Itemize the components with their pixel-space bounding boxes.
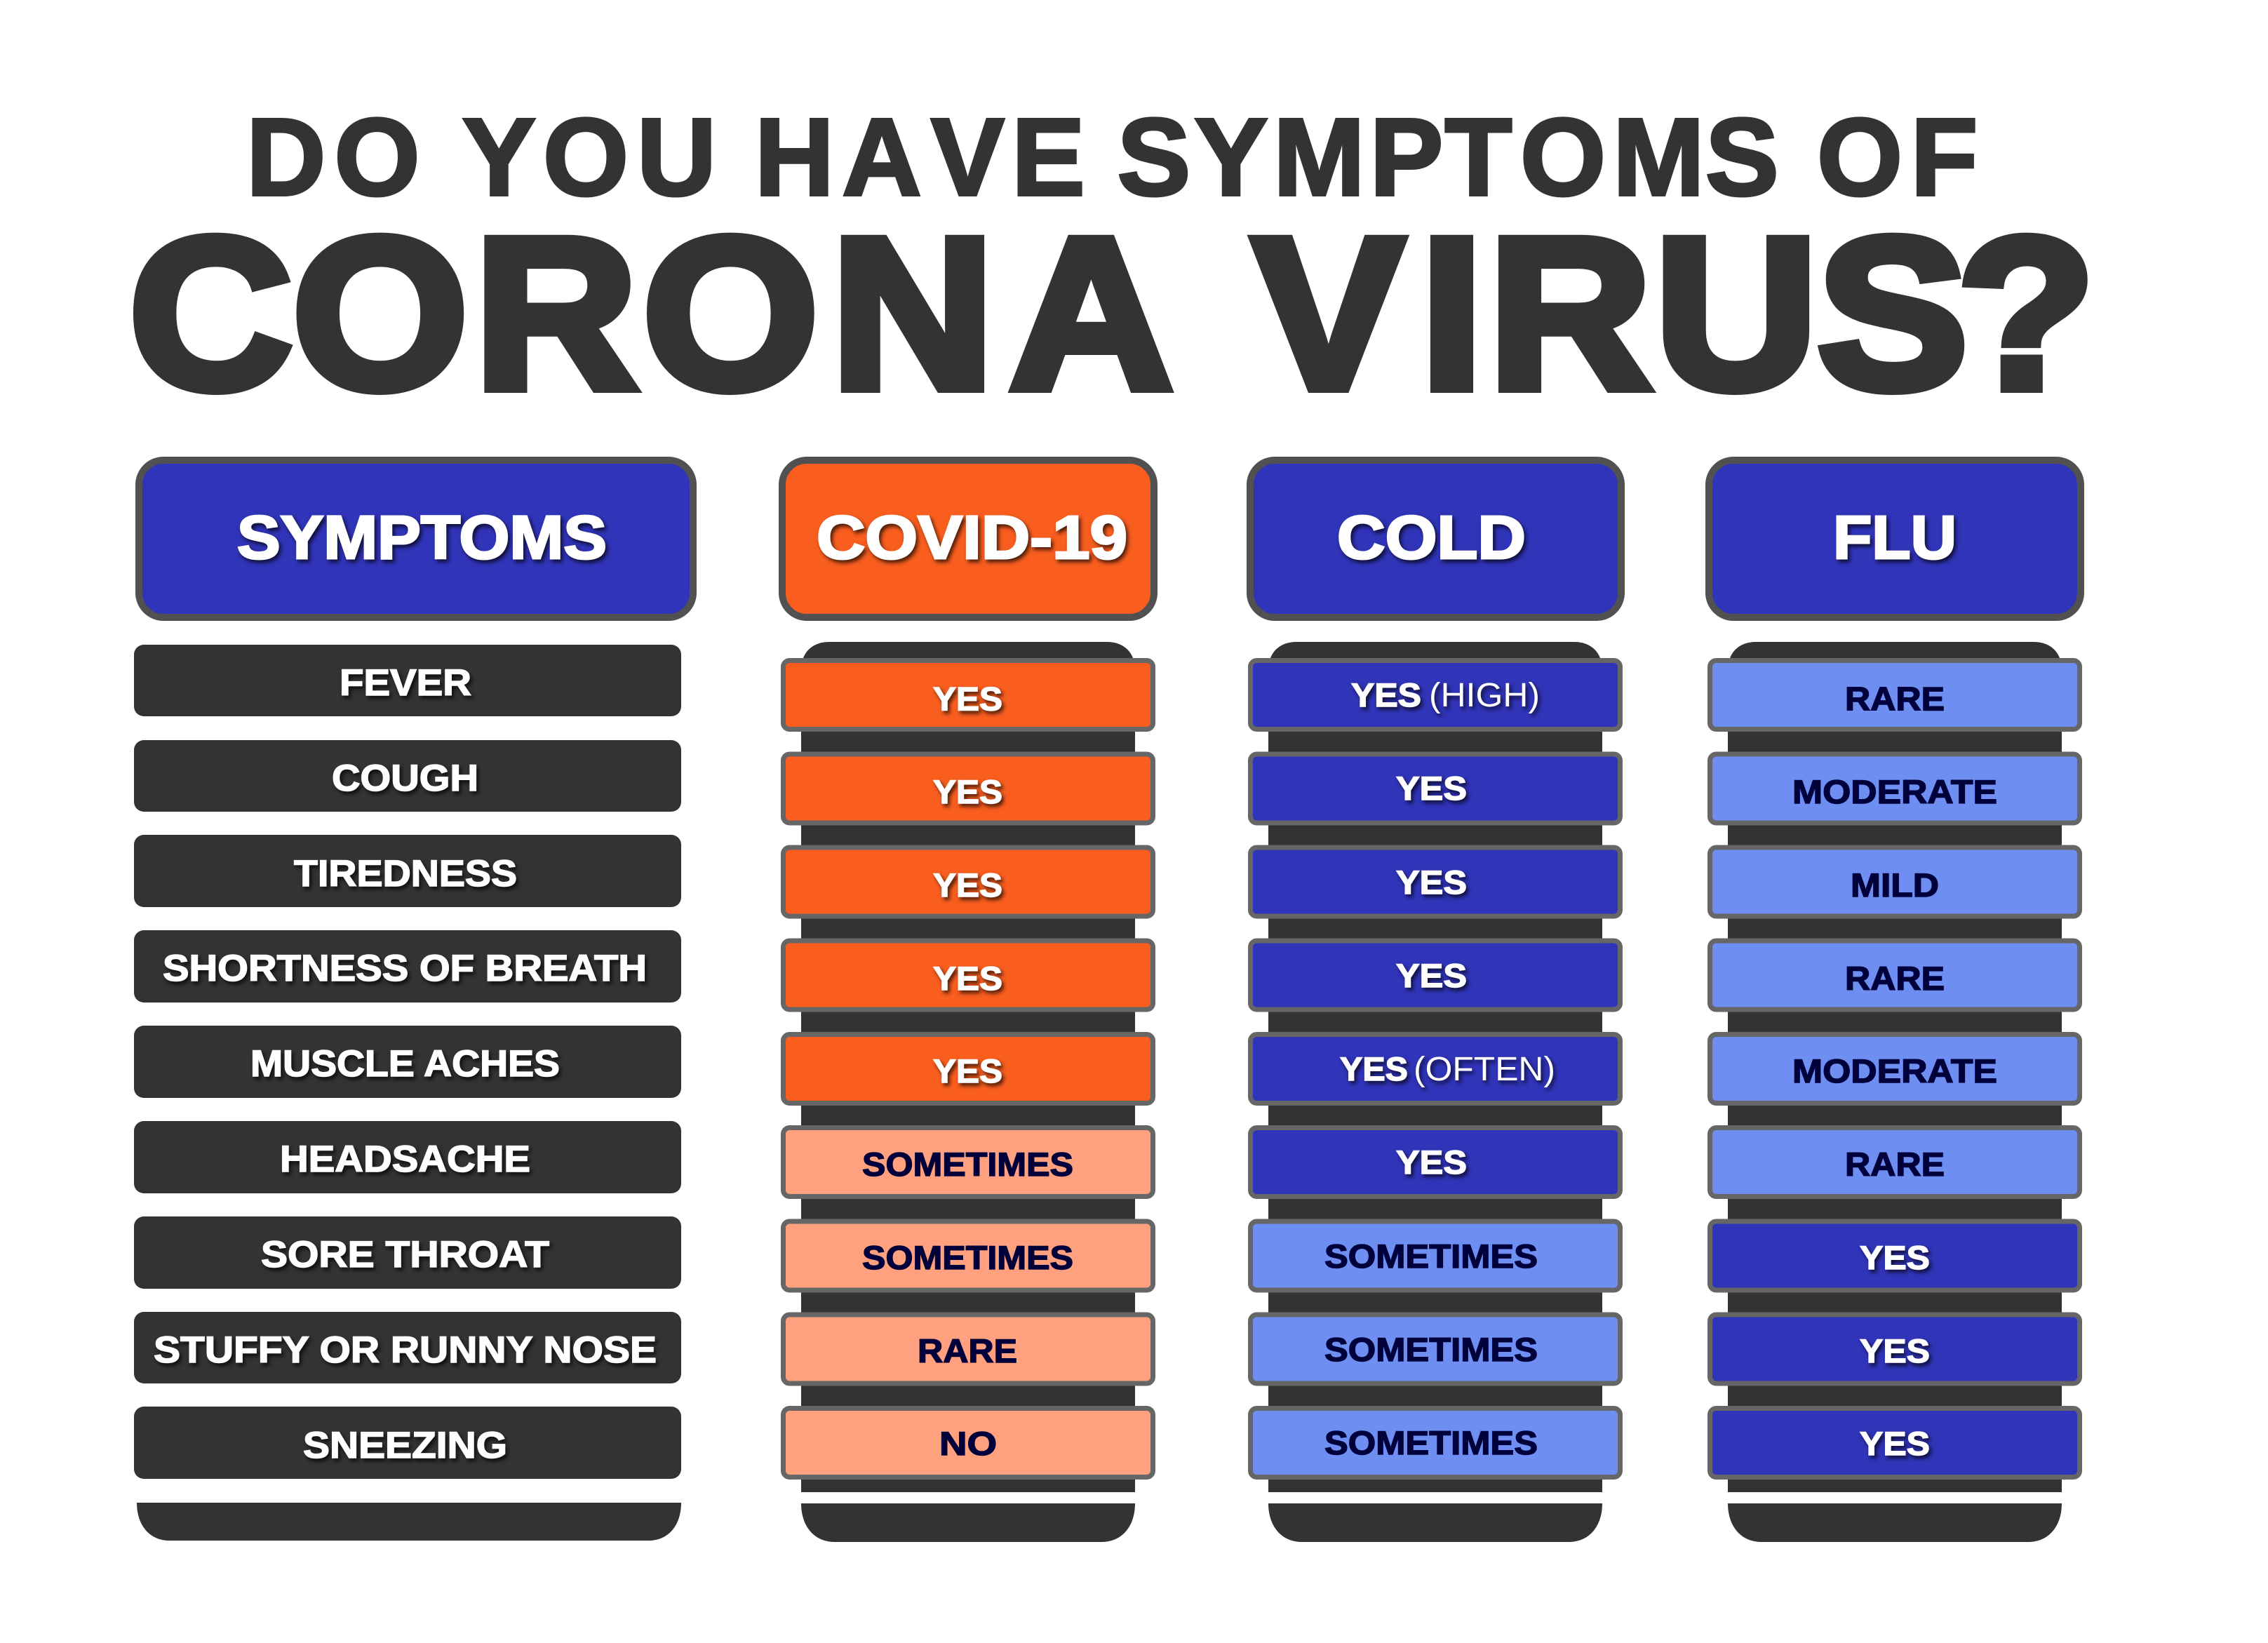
row: sneezing yes [1710,1409,2079,1477]
row: fever yes high: (HIGH) [1429,677,1540,714]
title line 2: VIRUS? [1253,193,2095,434]
row: muscle aches [134,1026,681,1098]
row: headache rare [1710,1128,2079,1197]
row: aches yes often [1250,1034,1621,1103]
row: stuffy or runny nose [134,1312,681,1383]
header: covid-19 [782,460,1154,617]
row: aches moderate: MODERATE [1792,1053,1997,1090]
bottom cap [137,1503,681,1541]
row: shortness yes [783,941,1153,1010]
panel: covid-19 column [782,460,1154,1542]
backing bar [1268,642,1602,1492]
row: shortness yes: YES [1396,958,1467,995]
header: cold: COLD [1337,504,1526,572]
title line 2: CORONA [129,193,1173,434]
row: stuffy or runny nose: STUFFY OR RUNNY NOSE [154,1329,657,1371]
row: muscle aches: MUSCLE ACHES [250,1043,560,1085]
row: headache sometimes: SOMETIMES [862,1146,1073,1183]
row: cough moderate [1710,754,2079,823]
row: headache rare: RARE [1845,1146,1945,1183]
row: shortness of breath: SHORTNESS OF BREATH [163,948,647,989]
row: cough yes [783,754,1153,823]
row: nose sometimes: SOMETIMES [1324,1332,1538,1369]
header: cold [1250,460,1621,617]
title line 1: DO [246,96,420,219]
row: sneezing no [783,1409,1153,1477]
row: headache sometimes [783,1128,1153,1197]
backing bar [1728,642,2062,1492]
row: fever yes high: YES [1351,677,1421,714]
row: sneezing sometimes: SOMETIMES [1324,1425,1538,1462]
row: throat yes: YES [1860,1240,1930,1277]
row: nose rare: RARE [918,1333,1017,1370]
header: flu [1709,460,2081,617]
row: shortness yes [1250,941,1621,1010]
row: tiredness yes: YES [933,867,1002,904]
row: tiredness [134,835,681,907]
row: shortness yes: YES [933,960,1002,998]
row: aches yes: YES [933,1053,1002,1090]
row: cough yes: YES [933,774,1002,811]
row: sore throat [134,1216,681,1289]
title [129,96,2095,434]
row: nose yes [1710,1315,2079,1383]
row: fever yes high [1250,661,1621,730]
row: tiredness: TIREDNESS [294,853,517,894]
row: headache yes [1250,1128,1621,1197]
row: cough moderate: MODERATE [1792,774,1997,811]
row: nose yes: YES [1860,1333,1930,1370]
title line 1 [246,96,1978,219]
header: covid-19: COVID-19 [817,504,1127,572]
row: aches moderate [1710,1034,2079,1103]
title line 1: OF [1817,96,1978,219]
title line 1: SYMPTOMS [1118,96,1779,219]
row: throat sometimes [1250,1221,1621,1290]
row: cough: COUGH [332,758,478,799]
row: cough yes [1250,754,1621,823]
row: nose sometimes [1250,1315,1621,1383]
row: fever [134,645,681,716]
row: shortness of breath [134,930,681,1002]
title line 2 [129,193,2095,434]
row: fever rare: RARE [1845,680,1945,718]
row: throat sometimes [783,1221,1153,1290]
row: tiredness yes [1250,847,1621,916]
row: tiredness mild [1710,847,2079,916]
row: aches yes often: (OFTEN) [1414,1051,1555,1088]
row: shortness rare: RARE [1845,960,1945,998]
row: throat sometimes: SOMETIMES [862,1240,1073,1277]
row: headsache [134,1121,681,1193]
row: tiredness yes [783,847,1153,916]
header: flu: FLU [1833,504,1957,572]
title line 1: YOU [462,96,716,219]
row: cough yes: YES [1396,770,1467,807]
panel: flu column [1709,460,2081,1542]
row: nose rare [783,1315,1153,1383]
title line 1: HAVE [755,96,1085,219]
row: fever yes [783,661,1153,730]
row: sneezing: SNEEZING [303,1425,507,1466]
bottom cap [1728,1503,2062,1542]
bottom cap [1268,1503,1602,1542]
row: sore throat: SORE THROAT [261,1234,549,1275]
row: throat sometimes: SOMETIMES [1324,1238,1538,1275]
row: sneezing yes: YES [1860,1426,1930,1463]
panel: cold column [1250,460,1621,1542]
row: tiredness yes: YES [1396,864,1467,901]
row: fever yes: YES [933,680,1002,718]
row: aches yes often: YES [1340,1051,1408,1088]
panel: symptoms column [134,460,693,1541]
row: headsache: HEADSACHE [280,1139,530,1180]
row: headache yes: YES [1396,1144,1467,1181]
row: sneezing no: NO [939,1426,997,1463]
row: sneezing [134,1407,681,1479]
row: shortness rare [1710,941,2079,1010]
row: sneezing sometimes [1250,1409,1621,1477]
row: aches yes [783,1034,1153,1103]
bottom cap [801,1503,1135,1542]
row: tiredness mild: MILD [1851,867,1939,904]
row: fever rare [1710,661,2079,730]
backing bar [801,642,1135,1492]
row: cough [134,740,681,812]
header: symptoms [139,460,693,617]
row: fever: FEVER [340,662,471,704]
header: symptoms: SYMPTOMS [237,504,607,572]
row: throat yes [1710,1221,2079,1290]
